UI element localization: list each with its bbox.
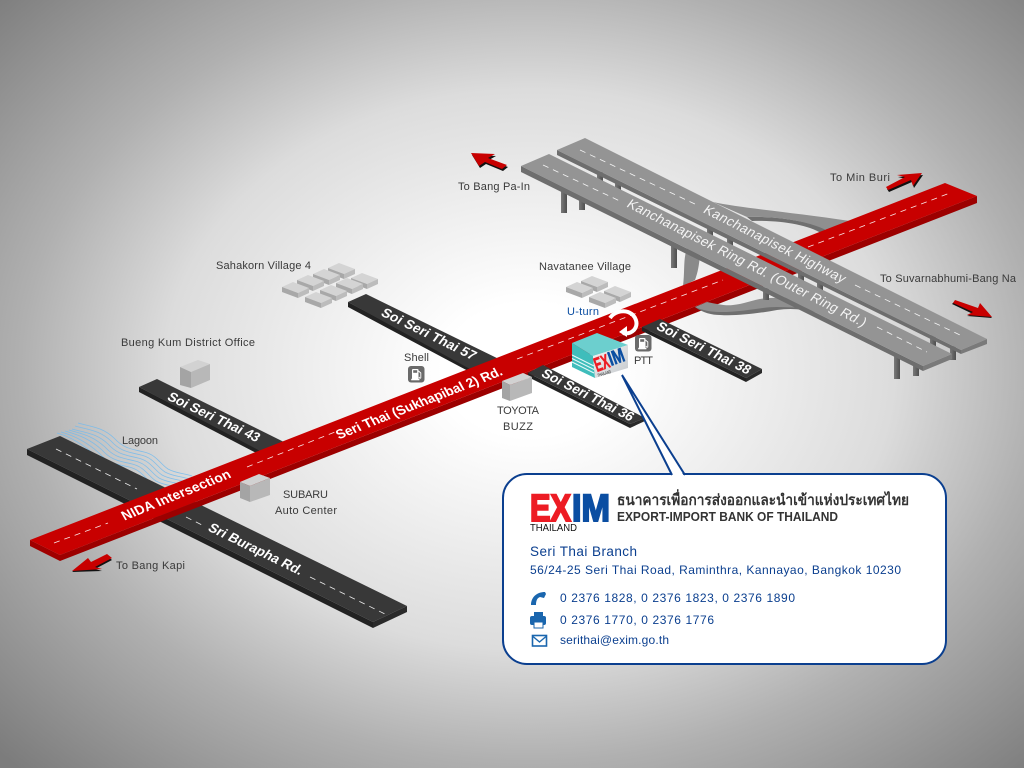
building: Toyota Buzz xyxy=(502,373,532,401)
label: SUBARU: SUBARU xyxy=(283,489,328,501)
label: BUZZ: BUZZ xyxy=(503,421,533,433)
label: NIDA Intersection: NIDA Intersection xyxy=(118,467,234,523)
arrow: To Bang Kapi xyxy=(72,554,112,572)
branch name: Seri Thai Branch xyxy=(530,544,637,559)
ramp: left loop xyxy=(683,248,700,286)
telephone numbers: 0 2376 1828, 0 2376 1823, 0 2376 1890 xyxy=(560,591,795,605)
icon: Shell fuel pump xyxy=(408,366,424,382)
icon: U-turn arrow xyxy=(610,311,636,337)
ramp: top loop xyxy=(713,202,850,233)
icon: telephone xyxy=(531,592,546,605)
label: Bueng Kum District Office: Bueng Kum District Office xyxy=(121,337,255,349)
label: To Min Buri: To Min Buri xyxy=(830,172,890,184)
logo: EXIM Thailand: IM xyxy=(572,488,610,530)
logo: EXIM Thailand xyxy=(530,488,610,534)
building: Bueng Kum District Office xyxy=(180,360,210,388)
logo: EXIM Thailand: THAILAND xyxy=(530,522,577,534)
label: Kanchanapisek Highway: Kanchanapisek Highway xyxy=(700,202,850,286)
road: Seri Thai (Sukhapibal 2) Rd. xyxy=(30,183,977,561)
blocks: Sahakorn Village 4 xyxy=(282,263,378,308)
bank name in English: EXPORT-IMPORT BANK OF THAILAND xyxy=(617,509,838,524)
road: Soi Seri Thai 36 xyxy=(528,365,645,428)
fax numbers: 0 2376 1770, 0 2376 1776 xyxy=(560,613,714,627)
callout panel: EXIM Seri Thai Branch xyxy=(503,375,946,664)
icon: printer xyxy=(530,612,546,628)
icon: PTT fuel pump xyxy=(635,335,652,352)
label: Soi Seri Thai 36: Soi Seri Thai 36 xyxy=(538,366,638,424)
label: Sahakorn Village 4: Sahakorn Village 4 xyxy=(216,260,311,272)
place labels xyxy=(116,172,1017,572)
label: U-turn: U-turn xyxy=(567,306,599,318)
arrow: To Bang Pa-In xyxy=(471,153,508,171)
road: Sri Burapha Rd. xyxy=(27,436,407,628)
label: Soi Seri Thai 57: Soi Seri Thai 57 xyxy=(378,305,480,363)
lagoon water xyxy=(57,423,192,488)
email address: serithai@exim.go.th xyxy=(560,633,669,647)
blocks: Navatanee Village xyxy=(566,276,631,308)
logo: EXIM Thailand: EX xyxy=(530,488,572,530)
label: Sri Burapha Rd.: Sri Burapha Rd. xyxy=(205,520,307,578)
arrow: To Suvarnabhumi-Bang Na xyxy=(952,300,992,318)
road: Soi Seri Thai 38 xyxy=(642,319,762,382)
label: PTT: PTT xyxy=(634,355,653,367)
road: Soi Seri Thai 57 xyxy=(348,294,505,372)
building: Subaru Auto Center xyxy=(240,474,270,502)
label: TOYOTA: TOYOTA xyxy=(497,405,540,417)
road: Kanchanapisek Ring Rd. xyxy=(521,154,952,371)
label: Navatanee Village: Navatanee Village xyxy=(539,261,631,273)
label: Soi Seri Thai 43: Soi Seri Thai 43 xyxy=(164,389,264,445)
arrow: To Min Buri xyxy=(886,173,923,192)
branch address: 56/24-25 Seri Thai Road, Raminthra, Kannayao, Bangkok 10230 xyxy=(530,563,901,577)
icon: envelope xyxy=(532,636,546,646)
label: Auto Center: Auto Center xyxy=(275,505,337,517)
callout pointer xyxy=(622,375,685,476)
label: Seri Thai (Sukhapibal 2) Rd.: Seri Thai (Sukhapibal 2) Rd. xyxy=(333,364,505,442)
label: To Bang Pa-In: To Bang Pa-In xyxy=(458,181,530,193)
road: Kanchanapisek Highway xyxy=(557,138,987,354)
building: EXIM branch: THAILAND xyxy=(597,369,612,378)
label: Kanchanapisek Ring Rd. (Outer Ring Rd.): Kanchanapisek Ring Rd. (Outer Ring Rd.) xyxy=(624,197,870,329)
flyover pillars xyxy=(561,172,956,379)
building: EXIM branch: IM xyxy=(605,345,628,371)
building: EXIM branch: EX xyxy=(591,351,613,377)
label: Lagoon: Lagoon xyxy=(122,435,158,447)
ramp: lower loop xyxy=(695,297,815,315)
road: Soi Seri Thai 43 xyxy=(139,379,290,455)
bank name in Thai: ธนาคารเพื่อการส่งออกและนำเข้าแห่งประเทศไทย xyxy=(617,489,909,509)
label: To Suvarnabhumi-Bang Na: To Suvarnabhumi-Bang Na xyxy=(880,273,1017,285)
label: Soi Seri Thai 38: Soi Seri Thai 38 xyxy=(653,319,755,377)
label: To Bang Kapi: To Bang Kapi xyxy=(116,560,185,572)
building: EXIM branch xyxy=(572,333,628,378)
label: Shell: Shell xyxy=(404,352,429,364)
